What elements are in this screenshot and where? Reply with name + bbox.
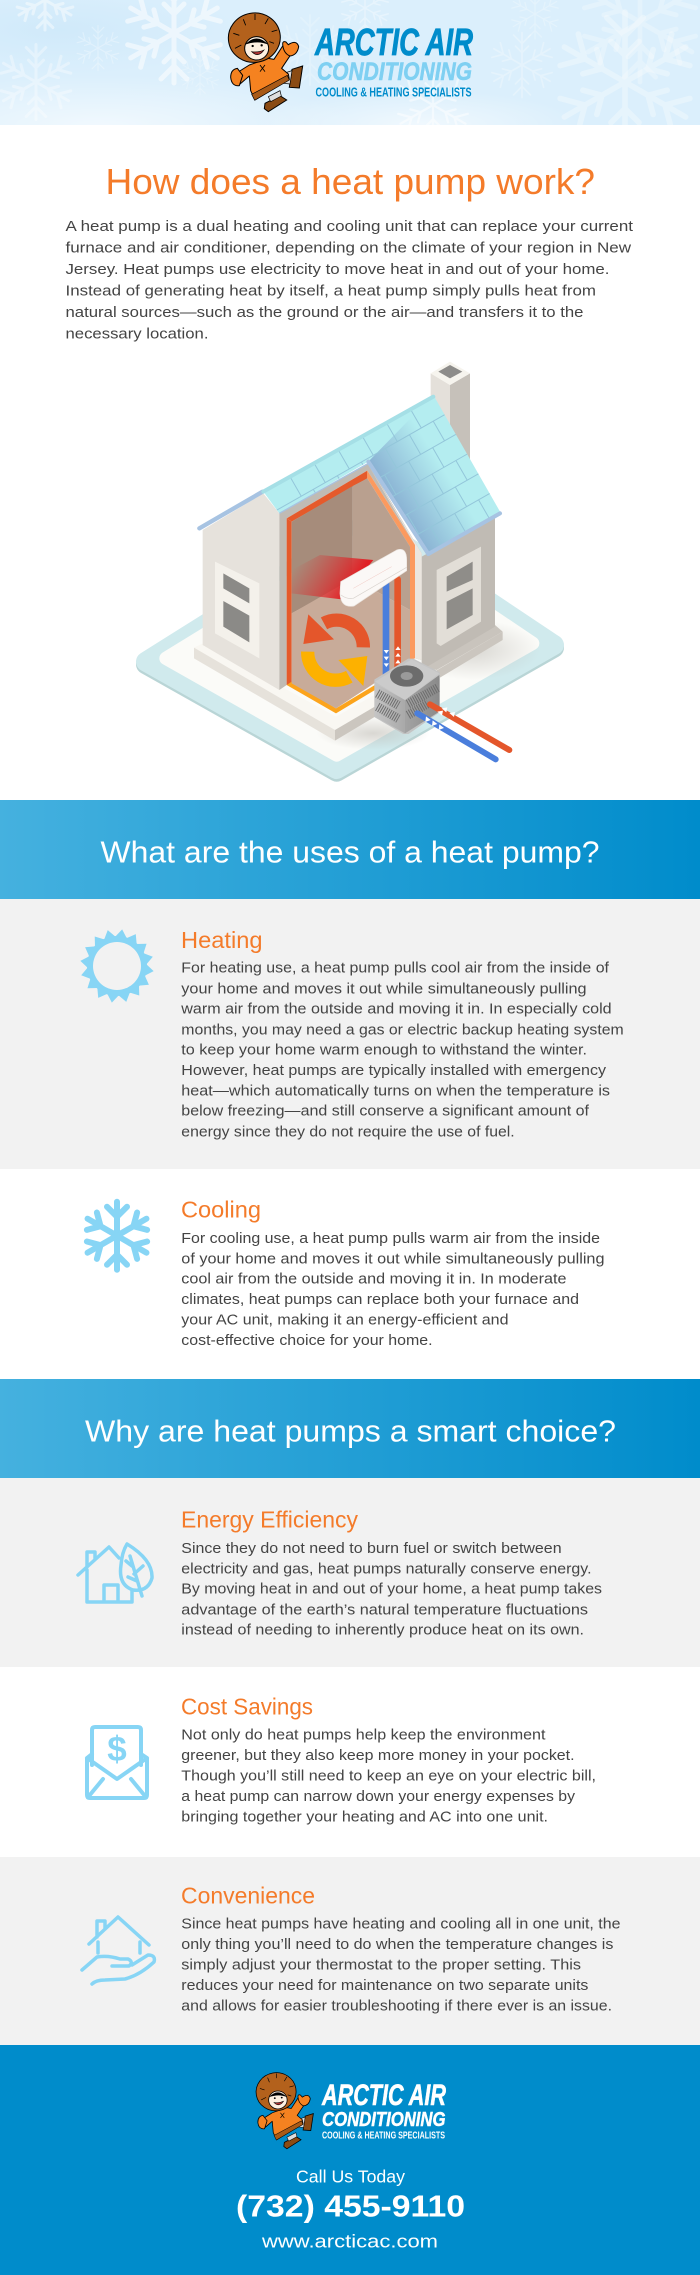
cooling text: climates, heat pumps can replace both your furnace and	[181, 1292, 579, 1308]
cost text: Not only do heat pumps help keep the environment	[181, 1728, 546, 1744]
header logo	[224, 9, 473, 112]
cooling text	[181, 1231, 605, 1349]
heating text: months, you may need a gas or electric backup heating system	[181, 1022, 624, 1038]
heating text: your home and moves it out while simultaneously pulling	[181, 981, 587, 997]
footer logo conditioning: CONDITIONING	[322, 2108, 446, 2131]
icon: house in hand	[82, 1917, 154, 1984]
cost text: a heat pump can narrow down your energy expenses by	[181, 1789, 576, 1805]
cost text: Though you’ll still need to keep an eye on your electric bill,	[181, 1768, 596, 1784]
intro text	[66, 218, 634, 343]
warm air stream	[292, 555, 373, 599]
header banner with snowflakes	[0, 0, 700, 125]
ground plate	[146, 522, 554, 772]
cycle arrows	[303, 614, 367, 686]
convenience text: only thing you’ll need to do when the temperature changes is	[181, 1937, 613, 1953]
cooling text: your AC unit, making it an energy-efficient and	[181, 1313, 509, 1329]
section banner: uses	[0, 800, 700, 899]
panel: heating	[0, 899, 700, 1169]
energy text: By moving heat in and out of your home, a heat pump takes	[181, 1582, 602, 1598]
cost text: bringing together your heating and AC into one unit.	[181, 1809, 548, 1825]
cooling heading: Cooling	[181, 1197, 261, 1223]
left window	[215, 562, 259, 658]
left wall	[203, 493, 279, 690]
heating text	[180, 961, 624, 1140]
convenience text: reduces your need for maintenance on two separate units	[181, 1978, 588, 1994]
header background	[0, 0, 700, 125]
icon: sun	[80, 929, 154, 1003]
energy heading: Energy Efficiency	[181, 1507, 358, 1533]
outdoor pipes	[417, 704, 509, 759]
panel: cooling	[83, 1197, 605, 1349]
energy text	[181, 1541, 602, 1639]
logo tagline: COOLING & HEATING SPECIALISTS	[316, 86, 472, 100]
panel: cost savings	[87, 1693, 596, 1825]
panel: energy efficiency	[0, 1478, 700, 1667]
banner heading: What are the uses of a heat pump?	[100, 835, 600, 870]
heating text: below freezing—and still conserve a significant amount of	[181, 1104, 590, 1120]
heating text: warm air from the outside and moving it in. In especially cold	[180, 1002, 612, 1018]
intro text: furnace and air conditioner, depending on the climate of your region in New	[66, 240, 631, 256]
logo name: ARCTIC AIR	[314, 22, 473, 64]
heating text: heat—which automatically turns on when the temperature is	[181, 1083, 610, 1099]
convenience heading: Convenience	[181, 1882, 315, 1908]
icon: envelope with dollar	[87, 1727, 147, 1798]
cutaway border	[287, 471, 415, 713]
convenience text: and allows for easier troubleshooting if there ever is an issue.	[181, 1998, 612, 2014]
cooling text: of your home and moves it out while simultaneously pulling	[181, 1251, 605, 1267]
heating text: However, heat pumps are typically installed with emergency	[181, 1063, 607, 1079]
heating text: to keep your home warm enough to withstand the winter.	[181, 1043, 587, 1059]
footer mascot	[253, 2070, 313, 2149]
section banner: why	[0, 1379, 700, 1478]
indoor unit	[340, 549, 407, 606]
illustration: isometric house with heat pump	[146, 362, 554, 772]
intro text: Instead of generating heat by itself, a heat pump simply pulls heat from	[66, 282, 596, 300]
energy text: instead of needing to inherently produce heat on its own.	[181, 1623, 584, 1639]
convenience text: Since heat pumps have heating and cooling all in one unit, the	[181, 1917, 621, 1933]
cooling text: cool air from the outside and moving it in. In moderate	[181, 1272, 567, 1288]
phone number: (732) 455-9110	[236, 2190, 465, 2224]
cost heading: Cost Savings	[181, 1693, 313, 1719]
intro text: Jersey. Heat pumps use electricity to move heat in and out of your home.	[66, 261, 610, 278]
website: www.arcticac.com	[261, 2230, 438, 2251]
banner heading: Why are heat pumps a smart choice?	[85, 1414, 616, 1449]
cost text: greener, but they also keep more money in your pocket.	[181, 1748, 575, 1764]
indoor pipes	[384, 579, 401, 678]
outdoor unit	[375, 659, 439, 733]
footer logo	[253, 2070, 446, 2149]
heating text: For heating use, a heat pump pulls cool air from the inside of	[181, 961, 610, 977]
energy text: electricity and gas, heat pumps naturally conserve energy.	[181, 1561, 592, 1577]
intro text: necessary location.	[66, 326, 208, 343]
mascot	[224, 9, 303, 112]
logo conditioning: CONDITIONING	[317, 58, 472, 86]
title: How does a heat pump work?	[106, 161, 595, 202]
cutaway wall edges	[279, 463, 422, 690]
intro text: natural sources—such as the ground or the air—and transfers it to the	[66, 304, 584, 321]
icon: snowflake	[83, 1202, 151, 1270]
cooling text: cost-effective choice for your home.	[181, 1333, 433, 1349]
heating heading: Heating	[181, 927, 262, 953]
heating text: energy since they do not require the use of fuel.	[181, 1124, 515, 1140]
call label: Call Us Today	[296, 2167, 405, 2187]
dollar sign: $	[107, 1730, 127, 1769]
right window	[437, 547, 481, 646]
energy text: Since they do not need to burn fuel or switch between	[181, 1541, 562, 1557]
chimney	[431, 362, 470, 463]
footer logo tagline: COOLING & HEATING SPECIALISTS	[322, 2130, 445, 2142]
energy text: advantage of the earth’s natural temperature fluctuations	[181, 1602, 588, 1618]
cooling text: For cooling use, a heat pump pulls warm air from the inside	[181, 1231, 600, 1247]
convenience text	[181, 1917, 621, 2014]
cost text	[181, 1728, 596, 1825]
intro text: A heat pump is a dual heating and cooling unit that can replace your current	[66, 218, 634, 235]
footer	[0, 2045, 700, 2275]
footer logo name: ARCTIC AIR	[321, 2079, 446, 2112]
icon: house and leaf	[78, 1544, 152, 1602]
room interior	[292, 478, 410, 708]
right wall	[422, 517, 495, 670]
foundation	[194, 625, 503, 741]
roof	[197, 394, 502, 556]
convenience text: simply adjust your thermostat to the proper setting. This	[181, 1957, 581, 1973]
panel: convenience	[0, 1857, 700, 2045]
